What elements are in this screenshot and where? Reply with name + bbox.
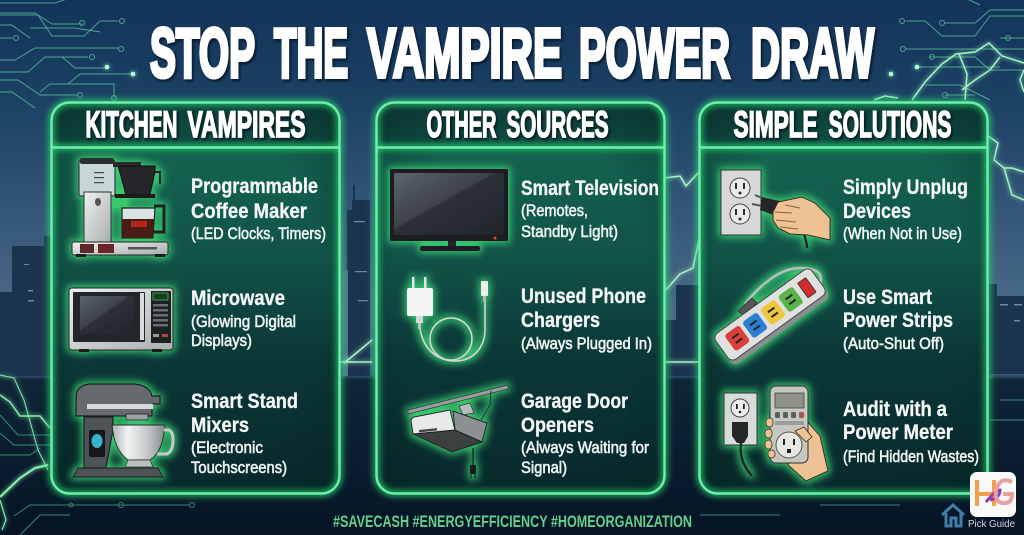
item text: phone charger: Chargers xyxy=(521,309,600,332)
item text: garage door opener: Garage Door xyxy=(521,390,628,413)
item text: smart television: Smart Television xyxy=(521,177,659,200)
lightning: centre gaps xyxy=(340,172,699,363)
item text: microwave: Microwave xyxy=(191,287,285,310)
panel frame: kitchen xyxy=(52,102,340,494)
item text: stand mixer: Mixers xyxy=(191,414,249,437)
lightning: left bottom xyxy=(0,375,50,530)
item text: garage door opener: (Always Waiting for xyxy=(521,438,649,457)
panel: other sources xyxy=(376,102,664,494)
item text: stand mixer: Touchscreens) xyxy=(191,458,287,477)
panel: kitchen vampires xyxy=(52,102,340,494)
title: STOP xyxy=(150,14,255,92)
icon: unplug hand xyxy=(721,170,830,248)
item text: microwave xyxy=(191,287,296,350)
circuit traces: left xyxy=(0,0,131,108)
hashtags: #SAVECASH #ENERGYEFFICIENCY #HOMEORGANIZATION xyxy=(333,512,692,531)
item text: power strips: (Auto-Shut Off) xyxy=(843,334,944,353)
icon: microwave xyxy=(69,288,173,352)
item text: garage door opener xyxy=(521,390,649,477)
item text: microwave: Displays) xyxy=(191,331,252,350)
item text: garage door opener: Signal) xyxy=(521,458,567,477)
panel frame: simple solutions xyxy=(700,102,988,494)
panel frame: other sources xyxy=(376,102,664,494)
heading: kitchen vampires: KITCHEN xyxy=(86,104,178,145)
icon: house xyxy=(942,505,964,526)
item text: microwave: (Glowing Digital xyxy=(191,312,296,331)
item text: phone charger xyxy=(521,285,652,353)
item text: unplug xyxy=(843,176,968,243)
item text: power meter xyxy=(843,398,979,466)
lightning: right top xyxy=(874,43,1024,200)
item text: unplug: Simply Unplug xyxy=(843,176,968,199)
item text: smart television: Standby Light) xyxy=(521,222,618,241)
item text: smart television xyxy=(521,177,659,241)
title: DRAW xyxy=(751,14,874,92)
heading: simple solutions: SIMPLE xyxy=(734,104,818,145)
title: VAMPIRE xyxy=(367,14,562,92)
title: THE xyxy=(274,14,348,92)
item text: power strips xyxy=(843,286,953,353)
item text: coffee maker: Programmable xyxy=(191,175,318,198)
icon: smart television xyxy=(390,169,508,251)
item text: coffee maker xyxy=(191,175,326,243)
heading: kitchen vampires: VAMPIRES xyxy=(188,104,306,145)
item text: power meter: Power Meter xyxy=(843,421,953,444)
icon: power meter xyxy=(724,386,828,481)
item text: stand mixer xyxy=(191,390,298,477)
item text: stand mixer: Smart Stand xyxy=(191,390,298,413)
item text: unplug: Devices xyxy=(843,200,911,223)
item text: unplug: (When Not in Use) xyxy=(843,224,962,243)
heading: simple solutions xyxy=(734,104,952,145)
icon: power strip xyxy=(713,267,831,366)
heading: other sources: OTHER xyxy=(426,104,496,145)
item text: power meter: (Find Hidden Wastes) xyxy=(843,447,979,466)
circuit nodes: left glowing xyxy=(105,65,135,76)
panel: simple solutions xyxy=(700,102,988,494)
logo badge xyxy=(970,472,1016,517)
icon: garage door opener xyxy=(408,385,508,478)
logo text: Pick Guide xyxy=(968,518,1015,530)
item text: power strips: Use Smart xyxy=(843,286,932,309)
icon: stand mixer xyxy=(73,384,173,477)
title: POWER xyxy=(579,14,730,92)
item text: smart television: (Remotes, xyxy=(521,201,588,220)
item text: phone charger: (Always Plugged In) xyxy=(521,334,652,353)
city skyline xyxy=(0,185,1024,376)
item text: phone charger: Unused Phone xyxy=(521,285,646,308)
logo: pick guide xyxy=(942,472,1016,530)
circuit nodes: right glowing xyxy=(889,65,919,76)
item text: coffee maker: (LED Clocks, Timers) xyxy=(191,224,326,243)
title xyxy=(150,14,874,92)
circuit traces: bottom xyxy=(0,400,1024,535)
icon: coffee maker xyxy=(72,158,168,257)
icon: phone charger xyxy=(407,277,488,361)
heading: other sources: SOURCES xyxy=(506,104,608,145)
item text: stand mixer: (Electronic xyxy=(191,438,263,457)
item text: coffee maker: Coffee Maker xyxy=(191,200,307,223)
item text: power strips: Power Strips xyxy=(843,309,953,332)
item text: power meter: Audit with a xyxy=(843,398,947,421)
circuit traces: right xyxy=(900,0,1024,100)
item text: garage door opener: Openers xyxy=(521,414,594,437)
